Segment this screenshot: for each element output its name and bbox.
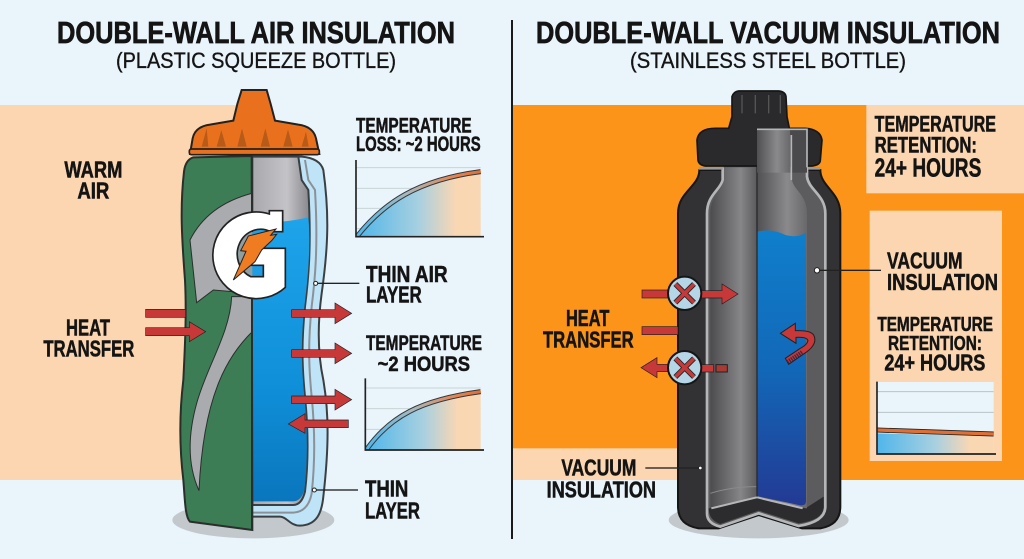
bottle: stainless steel bottle	[678, 128, 840, 528]
subtitle: stainless steel bottle: (STAINLESS STEEL BOTTLE)	[630, 48, 906, 73]
center line	[251, 156, 253, 530]
label: temperature retention top: 24+ HOURS	[875, 153, 981, 183]
arrow stub middle	[642, 327, 678, 335]
label: heat transfer	[43, 315, 134, 362]
center divider	[511, 20, 513, 539]
neck ring	[699, 164, 820, 172]
water	[757, 231, 806, 505]
label: temperature retention top	[875, 112, 996, 183]
arrows: heat transfer in left	[146, 309, 206, 342]
panel: hot orange background	[513, 105, 1024, 480]
inner bottom lines	[711, 497, 803, 508]
callout line: vacuum insulation bottom	[645, 466, 702, 470]
arrow: blocked heat in top	[642, 277, 738, 310]
peach box top	[866, 105, 1024, 193]
peach strip bottom	[513, 448, 680, 480]
label: vacuum insulation bottom: INSULATION	[547, 476, 656, 502]
center seam	[755, 128, 759, 497]
inner wall second line	[252, 160, 316, 513]
label: warm air	[64, 156, 122, 203]
label: vacuum insulation bottom	[547, 455, 656, 502]
label: heat transfer	[543, 305, 634, 352]
label: temperature retention middle: 24+ HOURS	[884, 350, 985, 376]
label: thin layer: LAYER	[365, 497, 420, 523]
label: temperature 2 hours: ~2 HOURS	[378, 352, 470, 376]
label: temperature retention top: RETENTION:	[875, 132, 977, 157]
arrows: heat transfer right	[288, 303, 352, 433]
grey swoosh top	[190, 193, 252, 303]
label: thin layer: THIN	[365, 476, 408, 502]
bottle: plastic squeeze bottle	[180, 156, 328, 530]
green half	[180, 156, 252, 530]
chart: temperature retention	[877, 382, 996, 454]
label: thin air layer: LAYER	[366, 282, 422, 308]
label: vacuum insulation right: INSULATION	[887, 269, 998, 295]
arrow: blocked heat out	[641, 351, 727, 384]
callout line: thin air layer	[314, 281, 359, 285]
label: heat transfer: HEAT	[566, 305, 609, 331]
label: thin air layer: THIN AIR	[366, 261, 448, 287]
chart: temperature loss top	[356, 160, 484, 237]
bottle cap	[189, 90, 319, 155]
label: temperature retention middle: RETENTION:	[888, 332, 982, 355]
icon: bolt	[233, 229, 277, 280]
label: vacuum insulation bottom: VACUUM	[561, 455, 636, 481]
label: temperature loss	[356, 113, 481, 156]
label: temperature loss: TEMPERATURE	[356, 113, 472, 137]
steel inner left	[710, 167, 757, 508]
subtitle: plastic squeeze bottle: (PLASTIC SQUEEZE BOTTLE)	[116, 48, 396, 73]
bottle shadow	[172, 502, 334, 538]
label: heat transfer: TRANSFER	[43, 336, 134, 362]
label: temperature loss: LOSS: ~2 HOURS	[356, 132, 481, 156]
grey swoosh lower	[190, 297, 252, 491]
icon: G logo	[213, 211, 285, 299]
outer shell right	[252, 156, 328, 526]
dark bottom between walls	[709, 497, 824, 524]
label: temperature retention middle	[877, 313, 993, 376]
label: heat transfer: TRANSFER	[543, 326, 634, 352]
chart: temperature loss bottom	[365, 378, 484, 450]
arrow: curved reflection in water	[780, 323, 815, 364]
panel: warm air background	[0, 105, 236, 480]
panel: left side plastic bottle	[43, 90, 484, 538]
label: temperature 2 hours	[366, 331, 482, 376]
label: thin air layer	[366, 261, 448, 308]
steel inner right	[757, 128, 807, 508]
title: air insulation: DOUBLE-WALL AIR INSULATION	[57, 15, 455, 50]
outer wall with interior	[707, 129, 825, 527]
label: heat transfer: HEAT	[66, 315, 110, 341]
label: warm air: AIR	[77, 177, 109, 203]
bottle cap	[697, 91, 822, 180]
bottle shadow	[669, 502, 849, 538]
inner wall	[252, 157, 310, 505]
water	[252, 217, 309, 501]
panel: right side steel bottle	[513, 91, 1024, 538]
label: temperature 2 hours: TEMPERATURE	[366, 331, 482, 355]
outer body	[678, 170, 840, 528]
label: vacuum insulation right	[887, 248, 998, 295]
label: warm air: WARM	[64, 156, 122, 182]
label: thin layer	[365, 476, 420, 523]
callout line: thin layer	[312, 488, 358, 492]
label: vacuum insulation right: VACUUM	[887, 248, 963, 274]
peach box middle	[870, 211, 1002, 461]
callout line: vacuum insulation right	[814, 268, 881, 273]
